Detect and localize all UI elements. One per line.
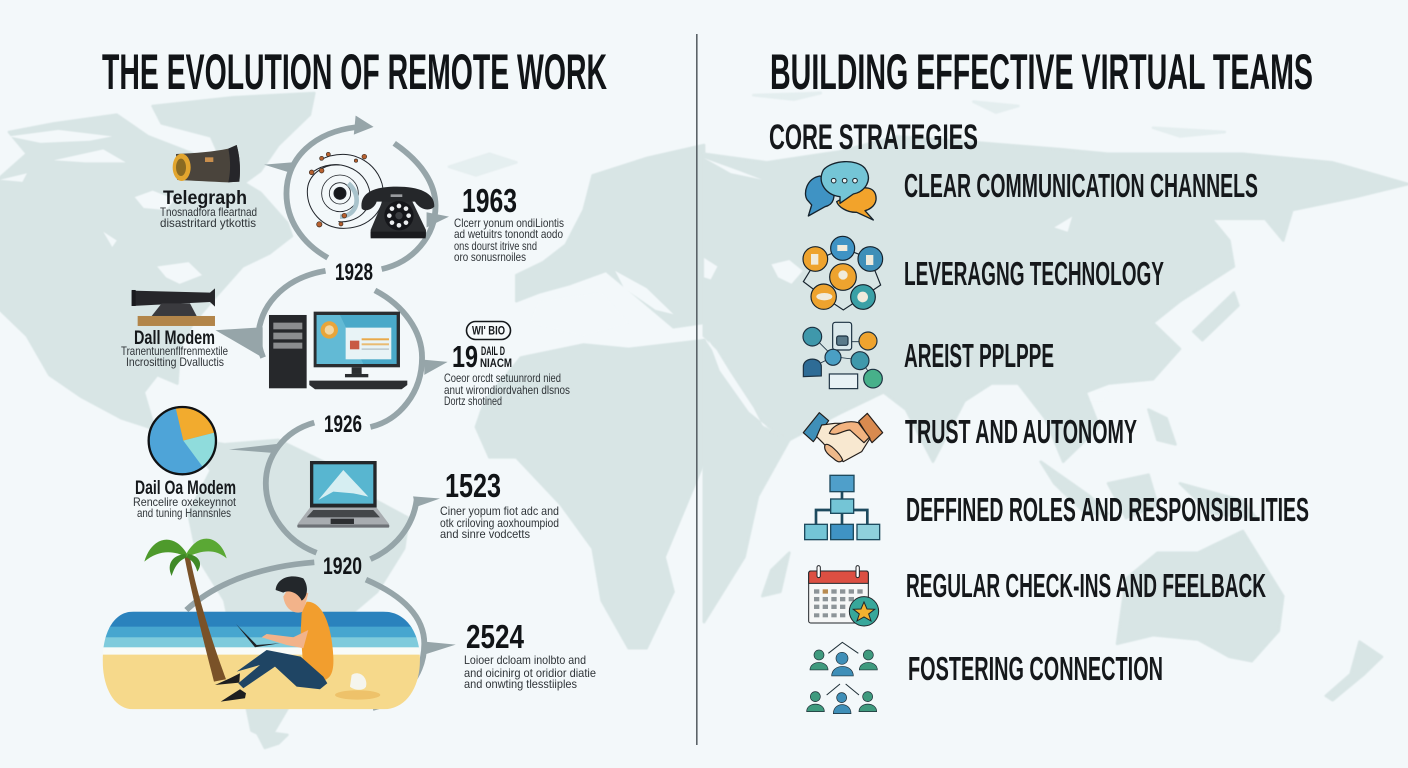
label: dial modem [121,328,228,369]
year 1523 block: Ciner yopum fiot adc and [440,504,559,518]
divider [696,34,698,745]
year block: 19 dial: NIACM [480,356,512,370]
year 1926: 1926 [324,411,362,438]
icon: handshake [803,413,883,462]
icon: desk instrument [132,288,215,326]
shell [335,673,380,700]
year 1523 block: otk criloving aoxhoumpiod [440,516,559,530]
year block: 19 dial: Dortz shotined [444,394,502,408]
year block: 19 dial: anut wirondiordvahen dlsnos [444,383,570,397]
icon: rotary telephone [361,187,434,238]
year 1920: 1920 [323,553,362,580]
label: dial oa modem: Rencelire oxekeynnot [133,495,237,509]
label: telegraph: Tnosnadfora fleartnad [160,205,257,219]
world map left [0,93,704,748]
strategy: trust and autonomy: TRUST AND AUTONOMY [905,413,1137,450]
timeline arcs and arrows [186,116,456,708]
person [215,576,333,702]
year 1963 block: oro sonusrnoiles [454,250,526,264]
label: telegraph: disastritard ytkottis [160,216,256,230]
icon: telegraph [173,145,240,182]
beach scene [100,610,423,711]
year 2524 block [464,618,596,691]
year 1523 block: and sinre vodcetts [440,527,530,541]
icon: chat bubbles [805,162,876,220]
title: evolution: THE EVOLUTION OF REMOTE WORK [102,44,607,100]
year block: 19 dial: 19 [452,339,478,374]
icon: orbit spiral [307,152,383,228]
year block: 19 dial [444,322,570,408]
strategy: leveraging technology: LEVERAGNG TECHNOLOGY [904,255,1164,292]
year 1963 block: ad wetuitrs tonondt aodo [454,227,563,241]
year 2524 block: and oicinirg ot oridior diatie [464,666,596,680]
strategy: areist pplppe: AREIST PPLPPE [904,337,1054,374]
label: dial oa modem [133,478,237,520]
icon: pie chart disc [147,405,218,477]
year 1963 block: 1963 [462,182,517,219]
year 1523 block [440,467,559,541]
year block: 19 dial: WI' BIO [472,324,505,338]
year 2524 block: and onwting tlesstiiples [464,677,577,691]
year block: 19 dial: DAIL D [481,344,505,358]
strategy: fostering connection: FOSTERING CONNECTION [908,650,1163,687]
year 1963 block: ons dourst itrive snd [454,239,537,253]
label: dial modem: Incrositting Dvalluctis [126,355,224,369]
icon: desktop computer [269,312,407,389]
illustration: person working on beach [100,539,423,711]
label: dial modem: Tranentunenflfrenmextile [121,344,228,358]
icon: apps network [803,322,882,389]
palm tree [144,539,227,682]
year block: 19 dial: Coeor orcdt setuunrord nied [444,371,561,385]
label: telegraph [160,188,257,230]
label: dial modem: Dall Modem [134,328,215,349]
year 1963 block: Clcerr yonum ondiLiontis [454,216,564,230]
icon: laptop [297,461,389,528]
icon: connected people [807,642,877,714]
label: dial oa modem: and tuning Hannsnles [137,506,231,520]
icon: calendar with star [809,566,879,626]
year 1523 block: 1523 [445,467,501,504]
year 1928: 1928 [335,259,373,286]
label: dial oa modem: Dail Oa Modem [135,478,236,499]
year 2524 block: Loioer dcloam inolbto and [464,653,586,667]
world map right [704,93,1408,700]
subheading: core strategies: CORE STRATEGIES [769,118,978,157]
year 2524 block: 2524 [466,618,525,655]
icon: org chart [805,475,880,540]
icon: technology network [803,236,883,310]
year 1963 block [454,182,564,264]
label: telegraph: Telegraph [163,188,247,209]
